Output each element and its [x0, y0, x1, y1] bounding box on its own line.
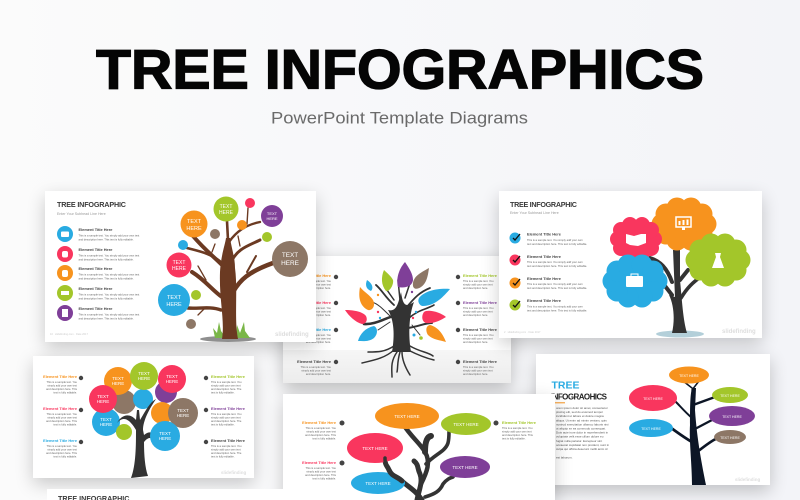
circle labels — [97, 371, 189, 441]
circle labels: HERE — [97, 399, 109, 404]
circles: TEXT — [173, 260, 185, 266]
circle labels: HERE — [112, 381, 124, 386]
left labels: This is a sample text. You — [47, 444, 77, 448]
left labels: and description here. This — [46, 419, 78, 423]
circle labels: HERE — [100, 422, 112, 427]
right labels: and description here. — [463, 286, 488, 290]
slide heading: TREE INFOGRAPHIC — [57, 200, 126, 209]
check list: Element Title Here — [527, 298, 562, 303]
right labels: text is fully editable. — [502, 436, 526, 440]
ovals: TEXT HERE — [453, 422, 479, 427]
right labels: simply add your own text — [211, 448, 241, 452]
circle front — [150, 421, 180, 451]
circles: TEXT — [187, 219, 202, 225]
left labels: This is a sample text. You — [301, 306, 331, 310]
right labels: and description here. — [463, 313, 488, 317]
circle labels: TEXT — [159, 431, 171, 436]
circle labels: HERE — [177, 413, 189, 418]
body text: piscing elit, sed do eiusmod tempor — [556, 410, 603, 414]
left labels: This is a sample text. You — [306, 466, 336, 470]
left labels — [302, 420, 337, 480]
left labels: Element Title Here — [302, 460, 337, 465]
right labels: Element Title Here — [463, 300, 498, 305]
panel: slide bottom right, oval tree — [536, 354, 770, 491]
right labels: simply add your own text — [463, 310, 493, 314]
circles: HERE — [219, 210, 234, 216]
dark tree — [650, 250, 702, 333]
check list: This is a sample text. You simply add your own — [527, 260, 583, 264]
right labels: This is a sample text. You — [211, 412, 242, 416]
footer: 2 slidefinding.com · Date 2017 — [504, 330, 541, 334]
body text: voluptate velit esse cillum dolore eu — [556, 435, 604, 439]
body text: incididunt ut labore et dolore magna — [556, 414, 604, 418]
panel: slide bottom left, overlapping circles tree — [33, 356, 254, 484]
panel: slide bottom centre, oval branching tree — [283, 394, 555, 500]
left labels: and description here. — [306, 372, 331, 376]
watermark: slidefinding — [275, 332, 309, 338]
left labels: and description here. This — [305, 473, 337, 477]
dark branching tree — [385, 424, 453, 500]
right labels: and description here. The — [211, 419, 242, 423]
tree with roots — [362, 280, 434, 377]
left labels: Element Title Here — [43, 438, 78, 443]
right labels: simply add your own text — [211, 416, 241, 420]
markers — [340, 420, 498, 466]
body text: nostrud exercitation ullamco laboris nisi — [556, 422, 609, 426]
leaves — [345, 262, 450, 342]
left labels: This is a sample text. You — [301, 279, 331, 283]
ovals: TEXT HERE — [394, 414, 420, 419]
left labels: Element Title Here — [43, 374, 78, 379]
body text: fugiat nulla pariatur. Excepteur sint — [556, 439, 602, 443]
list text: This is a sample text. You simply add your own text — [78, 272, 140, 276]
right labels: This is a sample text. You — [463, 279, 494, 283]
circles: HERE — [172, 266, 187, 272]
tree — [117, 399, 158, 478]
left labels: This is a sample text. You — [301, 365, 331, 369]
check list — [510, 232, 587, 312]
right labels: This is a sample text. You — [463, 333, 494, 337]
circle labels: TEXT — [138, 371, 150, 376]
check list: Element Title Here — [527, 276, 562, 281]
ovals: TEXT HERE — [643, 397, 663, 401]
tree ground — [656, 330, 704, 338]
right labels: Element Title Here — [502, 420, 537, 425]
right labels: simply add your own text — [463, 282, 493, 286]
circle labels: TEXT — [97, 394, 109, 399]
check markers — [334, 275, 460, 364]
check list: text and description here. This text is fully editable. — [527, 308, 587, 312]
right labels: This is a sample text. You — [463, 306, 494, 310]
grass — [213, 322, 250, 338]
left labels: This is a sample text. You — [301, 333, 331, 337]
list text: This is a sample text. You simply add your own text — [78, 254, 140, 258]
cloud: red — [610, 217, 662, 261]
check list: text and description here. This text is fully editable. — [527, 286, 587, 290]
right labels: simply add your own text — [463, 368, 493, 372]
circle labels: TEXT — [166, 374, 178, 379]
right labels: This is a sample text. You — [211, 380, 242, 384]
circles: HERE — [186, 226, 202, 232]
cloud: blue — [602, 254, 668, 308]
left labels: This is a sample text. You — [47, 380, 77, 384]
left labels: simply add your own text — [306, 470, 336, 474]
right labels: Element Title Here — [211, 374, 246, 379]
tree overlap on blue oval — [389, 470, 402, 481]
left labels: text is fully editable. — [313, 476, 336, 480]
circle labels: HERE — [138, 376, 150, 381]
left labels: and description here. This — [46, 451, 78, 455]
right labels: text is fully editable. — [211, 454, 235, 458]
list text: and description here. This text is fully editable. — [78, 237, 134, 241]
check list: text and description here. This text is fully editable. — [527, 264, 587, 268]
right labels: and description here. — [463, 340, 488, 344]
right labels: and description here. The — [211, 451, 242, 455]
left labels: simply add your own text — [301, 368, 331, 372]
list text: and description here. This text is fully editable. — [78, 257, 134, 261]
body text: Duis aute irure dolor in reprehenderit in — [556, 431, 608, 435]
circle labels: HERE — [166, 379, 178, 384]
check list: This is a sample text. You simply add your own — [527, 238, 583, 242]
body text — [556, 406, 609, 460]
circles: TEXT — [167, 295, 182, 301]
right labels: Element Title Here — [463, 273, 498, 278]
left labels: Element Title Here — [297, 273, 332, 278]
left labels: simply add your own text — [306, 430, 336, 434]
left labels: text is fully editable. — [54, 454, 77, 458]
right labels: Element Title Here — [211, 406, 246, 411]
slide subheading: Enter Your Subhead Line Here — [57, 212, 106, 216]
circles: TEXT — [282, 252, 298, 259]
list text: Element Title Here — [78, 247, 113, 252]
panel: slide centre, leafy tree with roots — [283, 256, 511, 389]
circles behind tree — [89, 362, 198, 440]
ovals: TEXT HERE — [679, 374, 699, 378]
tree overlap on red oval — [385, 458, 389, 470]
list text: and description here. This text is fully editable. — [78, 316, 134, 320]
circles: HERE — [281, 260, 299, 267]
dark tree — [665, 381, 718, 485]
left labels: simply add your own text — [301, 336, 331, 340]
list text — [78, 227, 140, 320]
circles: HERE — [266, 216, 278, 221]
list text: Element Title Here — [78, 227, 113, 232]
list text: and description here. This text is fully editable. — [78, 276, 134, 280]
circles: HERE — [166, 302, 182, 308]
check list: Element Title Here — [527, 254, 562, 259]
markers — [79, 376, 208, 444]
right labels: Element Title Here — [463, 359, 498, 364]
circle labels: TEXT — [112, 376, 124, 381]
circles: TEXT — [220, 204, 232, 210]
ovals: TEXT HERE — [365, 481, 391, 486]
list text: Element Title Here — [78, 306, 113, 311]
list text: This is a sample text. You simply add your own text — [78, 312, 140, 316]
list text: Element Title Here — [78, 266, 113, 271]
right labels: text is fully editable. — [211, 422, 235, 426]
cloud: green — [686, 234, 750, 286]
body text: occaecat cupidatat non proident, sunt in — [556, 443, 609, 447]
left labels — [43, 374, 78, 458]
ovals — [629, 366, 755, 444]
right labels: simply add your own text — [463, 336, 493, 340]
panel: slide top right, cloud tree — [499, 191, 762, 344]
brown tree — [187, 208, 273, 339]
circle labels: TEXT — [177, 408, 189, 413]
left labels: and description here. This — [46, 387, 78, 391]
right labels: and description here. The — [211, 387, 242, 391]
slide heading: TREE — [552, 380, 580, 392]
right labels: Element Title Here — [211, 438, 246, 443]
accent line — [555, 402, 565, 403]
left labels: Element Title Here — [43, 406, 78, 411]
list text: This is a sample text. You simply add your own text — [78, 234, 140, 238]
check list: Element Title Here — [527, 232, 562, 236]
right labels: Element Title Here — [463, 327, 498, 332]
left labels: This is a sample text. You — [47, 412, 77, 416]
watermark: slidefinding — [221, 470, 246, 475]
cloud: orange — [652, 198, 716, 250]
subtitle: PowerPoint Template Diagrams — [271, 109, 528, 127]
left labels: text is fully editable. — [54, 390, 77, 394]
body text: aliqua. Ut enim ad minim veniam, quis — [556, 418, 607, 422]
tree ground — [200, 336, 256, 342]
right labels — [502, 420, 537, 440]
left labels: and description here. — [306, 286, 331, 290]
left labels: text is fully editable. — [54, 422, 77, 426]
left labels: simply add your own text — [301, 282, 331, 286]
left labels — [297, 273, 332, 376]
right labels: simply add your own text — [502, 430, 532, 434]
right labels — [211, 374, 246, 458]
circles: TEXT — [267, 211, 278, 216]
body text: culpa qui officia deserunt mollit anim id — [556, 447, 608, 451]
right labels: and description here. — [463, 372, 488, 376]
body text: est laborum. — [556, 456, 573, 460]
ovals: TEXT HERE — [641, 427, 661, 431]
left labels: Element Title Here — [297, 359, 332, 364]
circle labels: TEXT — [100, 417, 112, 422]
left labels: and description here. This — [305, 433, 337, 437]
right labels: This is a sample text. You — [463, 365, 494, 369]
slide heading: TREE INFOGRAPHIC — [510, 200, 577, 209]
left labels: Element Title Here — [297, 300, 332, 305]
left labels: This is a sample text. You — [306, 426, 336, 430]
right labels: simply add your own text — [211, 384, 241, 388]
left labels: simply add your own text — [47, 384, 77, 388]
icon list — [57, 226, 73, 321]
slide heading second line: INFOGRAOHICS — [551, 392, 608, 402]
ovals: TEXT HERE — [362, 446, 388, 451]
left labels: Element Title Here — [297, 327, 332, 332]
circles — [158, 196, 308, 329]
list text: and description here. This text is fully editable. — [78, 296, 134, 300]
ovals: TEXT HERE — [720, 394, 740, 398]
left labels: simply add your own text — [47, 448, 77, 452]
panel: slide bottom edge, cropped — [47, 489, 283, 500]
right labels: text is fully editable. — [211, 390, 235, 394]
right labels: This is a sample text. You — [211, 444, 242, 448]
left labels: and description here. — [306, 313, 331, 317]
check list: This is a sample text. You simply add your own — [527, 282, 583, 286]
body text: ut aliquip ex ea commodo consequat. — [556, 426, 606, 430]
right labels — [463, 273, 498, 376]
left labels: and description here. — [306, 340, 331, 344]
left labels: simply add your own text — [47, 416, 77, 420]
ovals — [347, 403, 491, 494]
watermark: slidefinding — [722, 329, 756, 335]
list text: Element Title Here — [78, 286, 113, 291]
list text: This is a sample text. You simply add your own text — [78, 292, 140, 296]
left labels: simply add your own text — [301, 310, 331, 314]
panel: slide top left, circle tree — [45, 191, 316, 348]
ovals: TEXT HERE — [452, 465, 478, 470]
title: TREE INFOGRAPHICS — [96, 37, 704, 100]
check list: This is a sample text. You simply add your own — [527, 304, 583, 308]
watermark: slidefinding — [735, 477, 760, 482]
ovals: TEXT HERE — [722, 415, 742, 419]
footer: 10 slidefinding.com · Date 2017 — [50, 332, 88, 336]
ovals: TEXT HERE — [720, 436, 740, 440]
left labels: text is fully editable. — [313, 436, 336, 440]
right labels: and description here. This — [502, 433, 534, 437]
slide subheading: Enter Your Subhead Line Here — [510, 211, 559, 215]
check list: text and description here. This text is fully editable. — [527, 242, 587, 246]
right labels: This is a sample text. You — [502, 426, 533, 430]
circle labels: HERE — [159, 436, 171, 441]
body text: orem ipsum dolor sit amet, consectetur — [556, 406, 608, 410]
left labels: Element Title Here — [302, 420, 337, 425]
